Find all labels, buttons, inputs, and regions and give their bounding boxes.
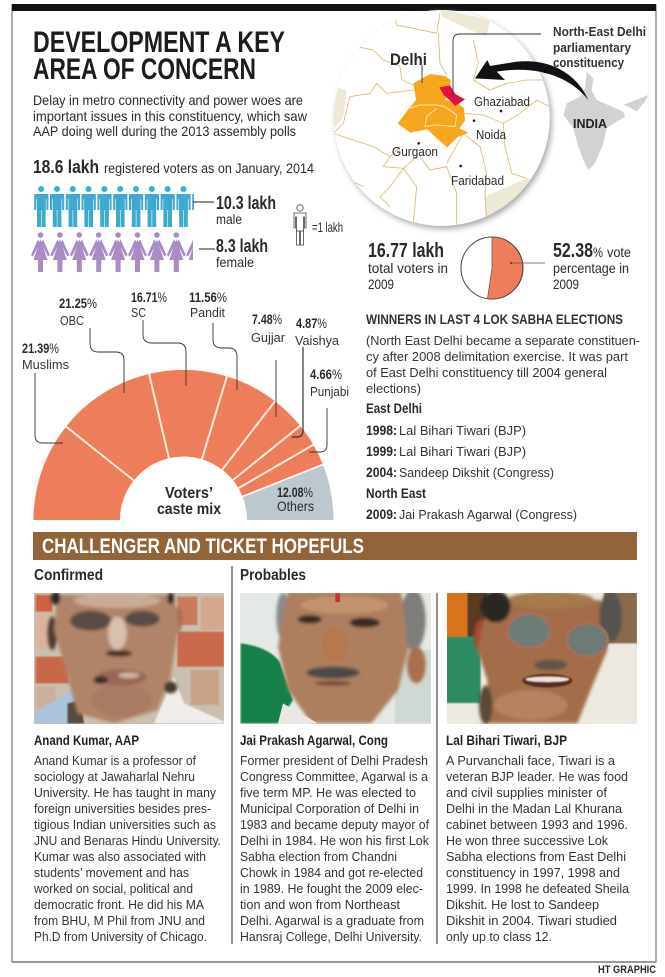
bio text: Delhi in 1984. He won his first Lok: [240, 833, 429, 848]
label: OBC: 21.25%: [59, 296, 97, 311]
map of Delhi in magnifier circle: Ghaziabad: [474, 94, 530, 109]
bio text: Sabha elections from East Delhi: [446, 849, 626, 864]
locator arrow: [475, 60, 588, 100]
total voters 2009: [368, 240, 448, 292]
column dividers: [232, 566, 437, 944]
segment: Others: [242, 464, 334, 520]
male count label: male: [216, 211, 242, 227]
bio text: veteran BJP leader. He was food: [446, 769, 628, 784]
registered voters headline: 18.6 lakh: [33, 157, 99, 177]
bio text: 1999. In 1998 he defeated Sheila: [446, 881, 630, 896]
label: SC: SC: [131, 305, 146, 320]
bio text: He won three successive Lok: [446, 833, 608, 848]
map of Delhi in magnifier circle: Delhi: [390, 50, 427, 69]
pictogram: female voters: [31, 232, 205, 272]
legend: one figure equals 1 lakh: =1 lakh: [312, 219, 343, 235]
segment: SC: [149, 370, 227, 459]
label: Punjabi: [310, 367, 349, 399]
bio text: and civil supplies minister of: [446, 785, 607, 800]
photo: Jai Prakash Agarwal: [240, 589, 431, 724]
legend: one figure equals 1 lakh: [294, 205, 343, 245]
bio text: Congress Committee, Agarwal is a: [240, 769, 429, 784]
bio: Lal Bihari Tiwari: Lal Bihari Tiwari, BJP: [446, 732, 567, 748]
label: Punjabi: Punjabi: [310, 384, 349, 399]
map of Delhi in magnifier circle: Gurgaon: [392, 144, 438, 159]
subheading: Probables: Probables: [240, 567, 306, 584]
bio text: from BHU, M Phil from JNU and: [34, 913, 205, 928]
bio text: cabinet between 1993 and 1996.: [446, 817, 628, 832]
bio text: Delhi. Agarwal is a graduate from: [240, 913, 424, 928]
segment: OBC: [66, 374, 169, 480]
bio text: [33, 753, 221, 944]
label: Muslims: Muslims: [22, 357, 69, 372]
credit: HT GRAPHIC: [598, 964, 656, 976]
bio text: five term MP. He was elected to: [240, 785, 416, 800]
bio text: [446, 753, 630, 944]
pie chart: vote percentage: [461, 237, 545, 299]
bio text: [240, 753, 429, 944]
vote percentage label: percentage in: [553, 260, 629, 276]
winners list: 2004:: [366, 465, 397, 480]
label: Muslims: 21.39%: [22, 341, 59, 356]
section banner: [33, 532, 637, 560]
label: Vaishya: [295, 316, 340, 348]
title: DEVELOPMENT A KEY: [33, 26, 285, 59]
title: AREA OF CONCERN: [33, 53, 256, 86]
bio text: A Purvanchali face, Tiwari is a: [446, 753, 616, 768]
bio text: Former president of Delhi Pradesh: [240, 753, 428, 768]
India inset map: [563, 72, 648, 170]
label: Pandit: Pandit: [190, 305, 225, 320]
label: Gujjar: [251, 312, 286, 345]
bio text: Anand Kumar is a professor of: [34, 753, 196, 768]
bio text: Dikshit. He lost to Sandeep: [446, 897, 599, 912]
label: Others: 12.08%: [277, 484, 313, 500]
map of Delhi in magnifier circle: [330, 8, 552, 233]
bio text: worked on social, political and: [33, 881, 193, 896]
bio text: students’ movement and has: [34, 865, 189, 880]
bio text: University. He has taught in many: [34, 785, 216, 800]
winners note: [366, 333, 640, 396]
winners list: Lal Bihari Tiwari (BJP): [399, 423, 526, 438]
map of Delhi in magnifier circle: Faridabad: [451, 173, 504, 188]
photo: Anand Kumar: [34, 592, 224, 724]
winners list: North East: [366, 486, 426, 501]
winners list: Sandeep Dikshit (Congress): [399, 465, 554, 480]
total voters 2009: 2009: [368, 276, 394, 292]
intro text: [33, 92, 308, 139]
photo: Lal Bihari Tiwari: [446, 591, 637, 725]
bio text: Dikshit in 2004. Tiwari studied: [446, 913, 617, 928]
label: Muslims: [22, 341, 69, 372]
bio text: tigious Indian universities such as: [34, 817, 216, 832]
bio text: sociology at Jawaharlal Nehru: [34, 769, 195, 784]
bio text: in 1989. He fought the 2009 elec-: [240, 881, 423, 896]
intro text: important issues in this constituency, which saw: [33, 108, 308, 124]
label: Others: [277, 484, 314, 514]
segment: Punjabi: [238, 445, 323, 496]
half-donut chart: voters' caste mix: [33, 370, 334, 520]
North-East Delhi label: [553, 24, 646, 70]
bio text: democratic front. He did his MA: [34, 897, 204, 912]
bio text: Hansraj College, Delhi University.: [240, 929, 422, 944]
label: SC: 16.71%: [131, 290, 167, 305]
bio: Lal Bihari Tiwari: [446, 732, 630, 944]
vote percentage label: [553, 240, 631, 292]
label: Pandit: [189, 290, 227, 320]
winners list: Lal Bihari Tiwari (BJP): [399, 444, 526, 459]
North-East Delhi label: constituency: [553, 55, 625, 70]
segment: Vaishya: [233, 426, 313, 488]
winners heading: WINNERS IN LAST 4 LOK SABHA ELECTIONS: [366, 311, 623, 327]
map of Delhi in magnifier circle: Noida: [476, 127, 507, 142]
total voters 2009: 16.77 lakh: [368, 240, 444, 262]
label: OBC: [59, 296, 97, 328]
winners list: 1999:: [366, 444, 397, 459]
bio text: Ph.D from University of Chicago.: [34, 929, 207, 944]
bio: Jai Prakash Agarwal: Jai Prakash Agarwal, Cong: [240, 732, 388, 748]
total voters 2009: total voters in: [368, 260, 448, 276]
male count label: 10.3 lakh: [216, 193, 276, 213]
winners list: Jai Prakash Agarwal (Congress): [399, 507, 577, 522]
label: Punjabi: 4.66%: [310, 367, 342, 382]
female count label: 8.3 lakh: [216, 236, 268, 256]
bio: Anand Kumar: Anand Kumar, AAP: [34, 732, 139, 748]
label: SC: [131, 290, 167, 320]
female count label: female: [216, 254, 254, 270]
winners list: 2009:: [366, 507, 397, 522]
winners list: 1998:: [366, 423, 397, 438]
winners list: East Delhi: [366, 401, 422, 416]
chart centre label: caste mix: [157, 501, 221, 518]
bio text: constituency in 1997, 1998 and: [446, 865, 620, 880]
section banner: CHALLENGER AND TICKET HOPEFULS: [42, 535, 364, 558]
bio text: Sabha election from Chandni: [240, 849, 397, 864]
chart centre label: [157, 485, 221, 518]
label: Pandit: 11.56%: [189, 290, 227, 305]
bio text: foreign universities besides pres-: [34, 801, 211, 816]
label: Gujjar: 7.48%: [252, 312, 282, 327]
bio text: Municipal Corporation of Delhi in: [240, 801, 419, 816]
winners note: elections): [366, 381, 421, 396]
North-East Delhi label: North-East Delhi: [553, 24, 646, 39]
segment: Pandit: [202, 376, 275, 470]
vote percentage label: vote: [607, 244, 631, 260]
label: OBC: OBC: [60, 313, 84, 328]
vote percentage label: 2009: [553, 276, 579, 292]
segment: Gujjar: [222, 401, 300, 480]
male count label: [193, 193, 276, 227]
female count label: [199, 236, 268, 270]
label: Gujjar: Gujjar: [251, 330, 286, 345]
subheading: Confirmed: Confirmed: [34, 567, 103, 584]
label: Vaishya: Vaishya: [295, 333, 340, 348]
intro text: AAP doing well during the 2013 assembly polls: [33, 123, 296, 139]
label: Others: Others: [277, 498, 314, 514]
bio: Anand Kumar: [33, 732, 221, 944]
vote percentage label: 52.38%: [553, 240, 603, 262]
chart centre label: Voters’: [165, 485, 213, 502]
winners panel: [366, 311, 640, 522]
North-East Delhi label: parliamentary: [553, 40, 632, 55]
Delhi region: [398, 74, 468, 147]
bio text: 1983 and became deputy mayor of: [240, 817, 429, 832]
title: [33, 26, 285, 86]
winners note: cy after 2008 delimitation exercise. It was part: [366, 349, 628, 364]
bio text: JNU and Benaras Hindu University.: [34, 833, 221, 848]
winners list: [366, 401, 577, 522]
pictogram: male voters: [34, 186, 206, 227]
segment: Muslims: [33, 427, 134, 520]
winners note: of East Delhi constituency till 2004 general: [366, 365, 607, 380]
winners note: (North East Delhi became a separate constituen-: [366, 333, 640, 348]
bio text: Kumar was also associated with: [34, 849, 206, 864]
bio text: Chowk in 1984 and got re-elected: [240, 865, 423, 880]
bio text: tion and won from Northeast: [240, 897, 400, 912]
registered voters headline: registered voters as on January, 2014: [104, 161, 314, 176]
registered voters headline: [33, 157, 314, 177]
constituency highlight: [439, 85, 465, 106]
bio: Jai Prakash Agarwal: [240, 732, 429, 944]
intro text: Delay in metro connectivity and power woes are: [33, 92, 303, 108]
bio text: only up to class 12.: [446, 929, 552, 944]
bio text: Delhi in the Madan Lal Khurana: [446, 801, 623, 816]
label: Vaishya: 4.87%: [296, 316, 327, 331]
caste leader lines: [35, 320, 327, 452]
India inset map: INDIA: [573, 116, 608, 131]
